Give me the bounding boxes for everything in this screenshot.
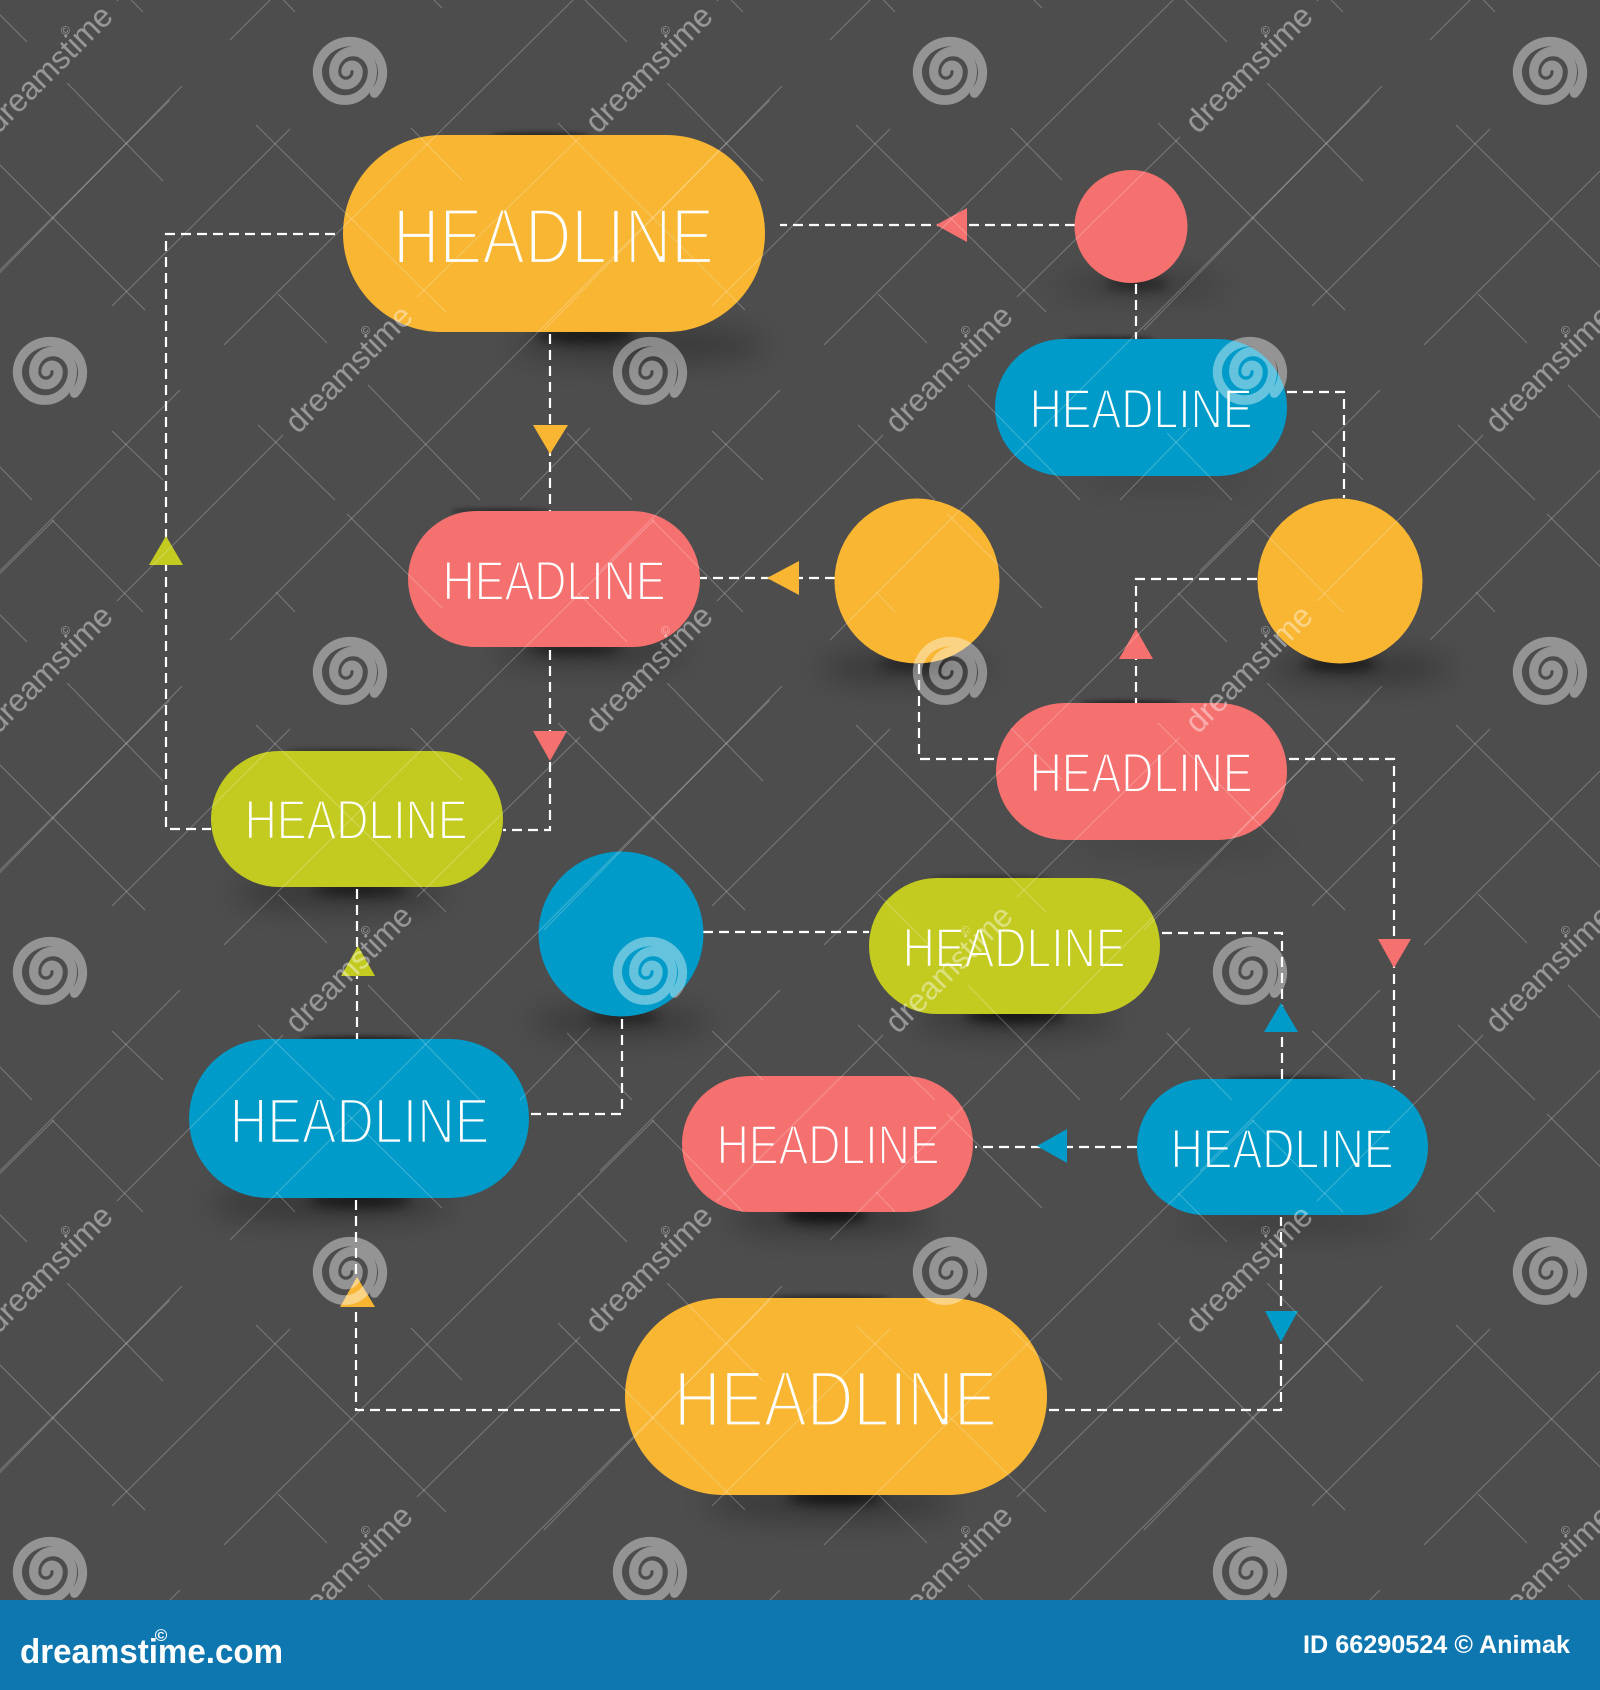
node: coral pill right [996, 703, 1287, 840]
watermark text: © [1257, 22, 1274, 38]
watermark text: dreamstime [1178, 1198, 1320, 1340]
connector: large blue pill to blue circle [531, 1016, 622, 1114]
watermark text: dreamstime [878, 898, 1020, 1040]
watermark text: © [1257, 622, 1274, 638]
watermark text: dreamstime [578, 1198, 720, 1340]
connector: blue pill to right orange circle [1287, 392, 1344, 498]
watermark text: dreamstime [278, 898, 420, 1040]
connector: large blue pill to bottom orange [356, 1200, 625, 1410]
arrow: blue down [1265, 1311, 1298, 1342]
watermark text: © [57, 22, 74, 38]
watermark text: © [1557, 1522, 1574, 1538]
connector: left orange circle to right coral pill [919, 664, 996, 759]
node: coral circle top [1074, 170, 1188, 283]
node: top orange pill [343, 135, 765, 332]
connector: right orange circle to coral pill [1136, 579, 1257, 703]
watermark text: dreamstime [278, 1498, 420, 1640]
watermark text: dreamstime [1178, 598, 1320, 740]
arrow: blue left [1037, 1129, 1067, 1163]
arrow: orange down [533, 425, 568, 454]
node: coral pill middle [408, 511, 700, 647]
watermark text: © [357, 322, 374, 338]
connector: coral circle to blue pill [1135, 284, 1137, 339]
node: large blue pill: HEADLINE [230, 1085, 489, 1157]
arrow: coral left top [936, 208, 967, 242]
arrowheads [149, 208, 1411, 1342]
connector: top orange to coral middle pill [549, 334, 551, 511]
node: blue pill top right [995, 339, 1287, 476]
arrow: coral down [533, 731, 567, 761]
dashed connectors [166, 225, 1394, 1410]
footer bar [0, 1600, 1600, 1690]
node: lower blue pill [1137, 1079, 1428, 1215]
connector: right coral pill to lower blue pill [1289, 759, 1394, 1087]
watermark text: © [657, 22, 674, 38]
watermark text: © [657, 622, 674, 638]
node: lime pill left [211, 751, 503, 887]
connector: lower blue pill to lower coral pill [975, 1146, 1137, 1148]
node: lower blue pill: HEADLINE [1171, 1118, 1394, 1180]
watermark text: dreamstime [878, 1498, 1020, 1640]
arrow: coral down right [1378, 939, 1411, 968]
watermark text: © [357, 1522, 374, 1538]
node: bottom orange pill: HEADLINE [674, 1354, 997, 1443]
node: lime pill left: HEADLINE [245, 789, 468, 851]
node: blue circle [538, 852, 704, 1016]
connector: coral middle pill to lime left pill [503, 650, 550, 830]
connector: top orange to lime left loop [166, 234, 335, 829]
watermark text: dreamstime [878, 298, 1020, 440]
node: blue pill top right: HEADLINE [1030, 378, 1253, 440]
watermark text: © [957, 922, 974, 938]
watermark text: dreamstime [1178, 0, 1320, 140]
arrow: lime up left [149, 536, 183, 565]
node: top orange pill: HEADLINE [393, 191, 714, 280]
node: lime pill right [869, 878, 1160, 1014]
node drop shadows [210, 132, 1450, 1520]
watermark text: © [657, 1222, 674, 1238]
arrow: orange up lower [340, 1277, 375, 1307]
node: large blue pill [189, 1039, 529, 1198]
watermark text: © [57, 622, 74, 638]
node: right orange circle [1258, 498, 1422, 664]
footer image id: ID 66290524 © Animak [1303, 1631, 1570, 1659]
watermark text: © [957, 322, 974, 338]
connector: lime left to large blue pill [356, 889, 358, 1039]
node: bottom orange pill [625, 1298, 1047, 1495]
watermark text: dreamstime [578, 598, 720, 740]
watermark text: © [957, 1522, 974, 1538]
node: lower coral pill: HEADLINE [717, 1114, 940, 1176]
watermark text: dreamstime [578, 0, 720, 140]
arrow: orange left middle [767, 561, 799, 595]
watermark text: © [357, 922, 374, 938]
connector: left orange circle to coral middle pill [700, 577, 835, 579]
watermark text: © [57, 1222, 74, 1238]
connector: bottom orange to lower blue pill [1049, 1217, 1281, 1410]
connector: coral circle to top orange [780, 224, 1075, 226]
node: lower coral pill [682, 1076, 973, 1212]
arrow: blue up [1264, 1003, 1298, 1032]
node: coral pill right: HEADLINE [1030, 742, 1253, 804]
connector: blue circle to lime right pill [703, 931, 869, 933]
footer logo text: dreamstime.com [20, 1633, 283, 1671]
connector: lime right pill to lower blue pill [1162, 933, 1282, 1079]
footer logo mark: © [155, 1626, 168, 1645]
node: lime pill right: HEADLINE [903, 917, 1126, 979]
watermark text: © [1557, 322, 1574, 338]
arrow: coral up right [1119, 629, 1153, 659]
arrow: lime up lower [341, 946, 375, 976]
node: coral pill middle: HEADLINE [443, 550, 666, 612]
watermark text: © [1257, 1222, 1274, 1238]
watermark text: dreamstime [278, 298, 420, 440]
node: left orange circle [834, 498, 1000, 664]
watermark text: © [1557, 922, 1574, 938]
